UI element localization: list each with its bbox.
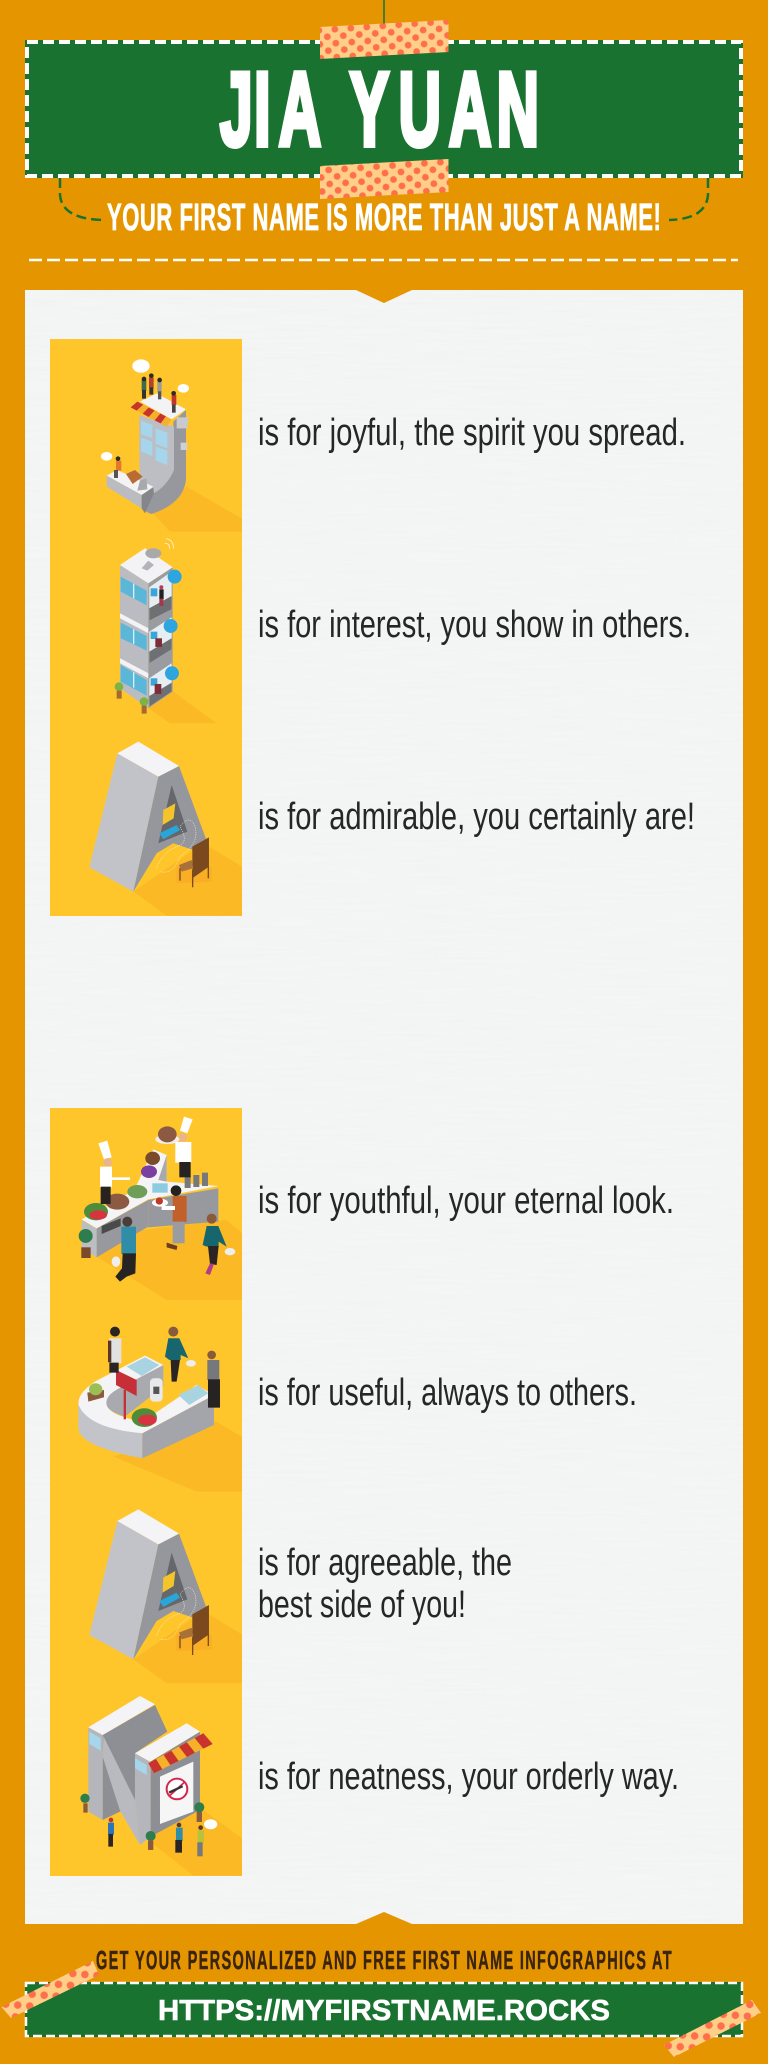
illustration: letter A repeat xyxy=(89,1509,242,1683)
illustration panel: lower xyxy=(50,1108,242,1876)
subtitle: YOUR FIRST NAME IS MORE THAN JUST A NAME! xyxy=(107,196,661,239)
tape: footer left xyxy=(2,1961,99,2018)
hanging thread xyxy=(383,0,385,24)
footer call to action: GET YOUR PERSONALIZED AND FREE FIRST NAME INFOGRAPHICS AT xyxy=(96,1947,672,1975)
dashed connector: right xyxy=(669,178,708,220)
panel: content xyxy=(25,290,743,1924)
title: JIA YUAN xyxy=(220,51,539,167)
tape: banner bottom xyxy=(320,159,448,199)
illustration: letter N xyxy=(80,1696,242,1876)
illustration: letter Y buffet xyxy=(79,1117,242,1300)
illustration: letter J xyxy=(101,359,242,532)
illustration panel: upper xyxy=(50,339,242,916)
url: HTTPS://MYFIRSTNAME.ROCKS xyxy=(158,1995,610,2027)
illustration: letter A xyxy=(89,742,242,916)
dashed connector: left xyxy=(60,178,103,220)
footer url banner xyxy=(25,1982,743,2037)
title banner xyxy=(25,40,743,178)
text: second letter A lines: best side of you! xyxy=(258,1584,466,1626)
text: letter U line: is for useful, always to others. xyxy=(258,1372,637,1414)
text: second letter A lines xyxy=(258,1542,512,1626)
tape: footer right xyxy=(664,2000,761,2057)
illustration: letter U counter xyxy=(78,1327,242,1492)
tape: banner top xyxy=(320,20,448,59)
illustration: letter I building xyxy=(115,539,217,723)
text: second letter A lines: is for agreeable, the xyxy=(258,1542,512,1584)
